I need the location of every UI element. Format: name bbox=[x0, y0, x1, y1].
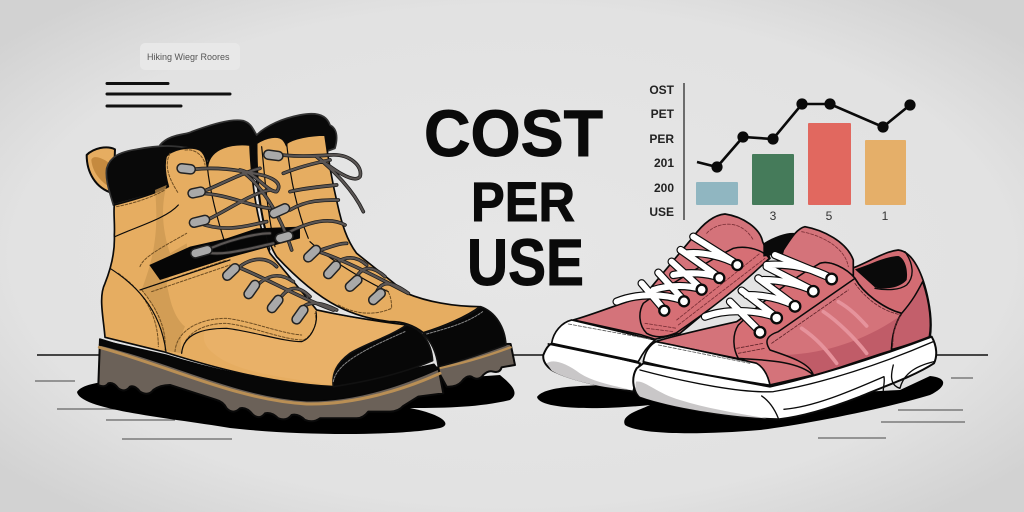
rear upper bbox=[257, 135, 480, 333]
rear boot bbox=[160, 114, 515, 387]
shading bbox=[142, 185, 187, 353]
rear sneaker bbox=[543, 214, 797, 392]
small label: hiking: Hiking Wiegr Roores bbox=[147, 52, 230, 62]
bars bbox=[696, 123, 906, 205]
bar labels: 5 bbox=[826, 209, 833, 223]
black welt bbox=[99, 340, 438, 401]
body bbox=[655, 263, 902, 385]
sneaker laces bbox=[617, 237, 832, 332]
axis labels: 201 bbox=[654, 156, 674, 170]
chart: cost per use bbox=[649, 83, 916, 223]
title: cost per use: COST bbox=[424, 96, 603, 170]
front sneaker bbox=[633, 227, 936, 419]
sneakers shadow bbox=[537, 376, 943, 433]
welt stripe bbox=[99, 347, 440, 404]
ground line bbox=[37, 354, 988, 356]
eyelets bbox=[182, 155, 381, 319]
axis labels: OST bbox=[649, 83, 675, 97]
axis labels bbox=[649, 83, 675, 219]
boot laces bbox=[193, 153, 408, 317]
title: cost per use: PER bbox=[471, 170, 575, 233]
motion lines bbox=[35, 378, 973, 439]
toe panel highlight bbox=[204, 312, 405, 385]
small label: hiking bbox=[140, 43, 240, 70]
toe cap bbox=[643, 342, 770, 385]
axis labels: PER bbox=[649, 132, 674, 146]
stitching bbox=[117, 150, 316, 353]
toe cap bbox=[333, 325, 433, 387]
eyestay bbox=[734, 263, 855, 375]
body shade bbox=[778, 315, 902, 375]
sneaker eyelets bbox=[659, 260, 837, 338]
axis labels: USE bbox=[649, 205, 674, 219]
collar bbox=[106, 146, 207, 205]
tongue bbox=[770, 227, 853, 300]
upper bbox=[102, 145, 432, 387]
trend line bbox=[697, 98, 916, 173]
rear sole bbox=[437, 343, 515, 387]
heel collar bbox=[770, 250, 931, 375]
text placeholder lines bbox=[107, 84, 230, 106]
heel tab bbox=[87, 147, 115, 193]
chart axis bbox=[683, 83, 685, 220]
black strap bbox=[149, 227, 300, 280]
icon: hiking boots bbox=[87, 114, 515, 421]
title: cost per use bbox=[424, 96, 603, 299]
title: cost per use: USE bbox=[467, 225, 584, 299]
axis labels: 200 bbox=[654, 181, 674, 195]
icon: sneakers bbox=[543, 214, 936, 419]
axis labels: PET bbox=[651, 107, 675, 121]
side stripes bbox=[802, 302, 867, 363]
sole bbox=[633, 337, 936, 419]
bar labels bbox=[770, 209, 889, 223]
rear collars bbox=[160, 114, 337, 177]
front boot bbox=[87, 145, 443, 421]
bar labels: 1 bbox=[882, 209, 889, 223]
bar labels: 3 bbox=[770, 209, 777, 223]
sole bbox=[98, 339, 443, 421]
boots shadow bbox=[77, 375, 515, 434]
